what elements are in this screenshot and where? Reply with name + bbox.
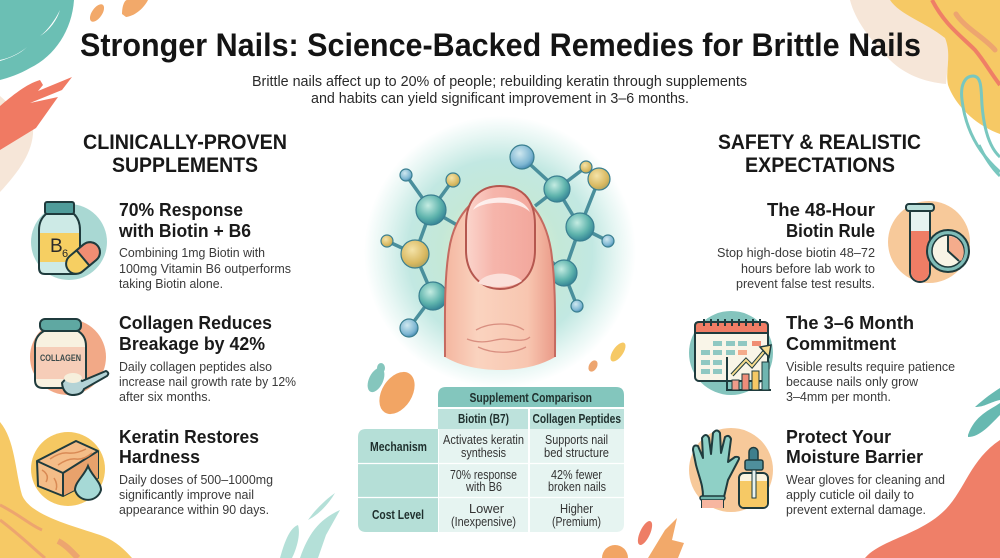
text: 3-6 month commitment: 3–4mm per month.	[786, 389, 891, 404]
text: protect your moisture barrier: apply cuticle oil daily to	[786, 487, 914, 502]
text: protect your moisture barrier	[786, 427, 945, 517]
text: collagen reduces breakage: increase nail growth rate by 12%	[119, 374, 296, 389]
text: 70% response: taking Biotin alone.	[119, 276, 223, 291]
table: supplement comparison: 70% response	[450, 468, 517, 482]
text: collagen reduces breakage	[119, 313, 296, 404]
subtitle: and habits can yield significant improvement in 3–6 months.	[311, 91, 689, 107]
icon: test tube and clock	[888, 201, 970, 283]
finger	[445, 205, 555, 370]
decoration: bottom right coral blob and teal brush	[865, 388, 1000, 558]
icon: keratin block and droplet	[31, 432, 105, 506]
decoration: top left teal and red brush strokes	[0, 0, 148, 192]
text: 48-hour biotin rule: prevent false test results.	[736, 276, 875, 291]
heading: safety and realistic expectations: SAFETY & REALISTIC	[718, 131, 921, 154]
nail	[466, 186, 535, 289]
text: protect your moisture barrier: Protect Your	[786, 427, 891, 447]
text: 70% response: 70% Response	[119, 200, 243, 220]
table: supplement comparison: broken nails	[548, 480, 606, 494]
title: Stronger Nails: Science-Backed Remedies for Brittle Nails	[80, 27, 921, 63]
text: protect your moisture barrier: Moisture Barrier	[786, 447, 923, 467]
text: 70% response: with Biotin + B6	[118, 221, 251, 241]
text: 48-hour biotin rule: Stop high-dose biotin 48–72	[717, 245, 875, 260]
text: 48-hour biotin rule: hours before lab work to	[741, 261, 875, 276]
heading: clinically-proven supplements	[83, 131, 287, 177]
table: supplement comparison	[358, 387, 624, 532]
text: collagen reduces breakage: Daily collagen peptides also	[119, 359, 272, 374]
table: supplement comparison: Supplement Comparison	[470, 391, 592, 405]
table: supplement comparison: bed structure	[544, 446, 609, 460]
text: 48-hour biotin rule: Biotin Rule	[786, 221, 875, 241]
icon: B6 bottle and capsule: 6	[62, 248, 68, 260]
table: supplement comparison: Cost Level	[372, 508, 424, 522]
table: supplement comparison: 42% fewer	[551, 468, 602, 482]
heading: safety and realistic expectations: EXPECTATIONS	[745, 154, 895, 177]
heading: safety and realistic expectations	[718, 131, 921, 177]
text: 48-hour biotin rule	[717, 200, 875, 291]
text: 48-hour biotin rule: The 48-Hour	[767, 200, 875, 220]
text: keratin restores hardness: significantly improve nail	[119, 487, 254, 502]
text: 70% response	[118, 200, 291, 291]
decoration: bottom centre brush marks	[280, 340, 684, 558]
icon: glove and cuticle oil dropper	[689, 428, 773, 512]
text: collagen reduces breakage: after six months.	[119, 389, 211, 404]
text: collagen reduces breakage: Breakage by 42%	[119, 334, 265, 354]
table: supplement comparison: synthesis	[461, 446, 506, 460]
text: 3-6 month commitment: Commitment	[786, 334, 896, 354]
heading: clinically-proven supplements: SUPPLEMENTS	[112, 154, 258, 177]
illustration: fingernail with molecules	[364, 116, 636, 388]
table: supplement comparison: Biotin (B7)	[458, 412, 509, 426]
text: 3-6 month commitment: Visible results require patience	[786, 359, 955, 374]
subtitle	[252, 74, 747, 107]
decoration: bottom left yellow blob	[0, 422, 132, 558]
text: keratin restores hardness	[119, 427, 273, 517]
text: 3-6 month commitment	[786, 313, 955, 404]
text: protect your moisture barrier: Wear gloves for cleaning and	[786, 472, 945, 487]
molecule atoms	[381, 145, 614, 337]
icon: collagen jar and scoop: COLLAGEN	[40, 353, 81, 363]
table: supplement comparison: (Premium)	[552, 515, 601, 529]
table: supplement comparison: Lower	[469, 502, 504, 516]
table: supplement comparison: Activates keratin	[443, 433, 524, 447]
subtitle: Brittle nails affect up to 20% of people; rebuilding keratin through supplements	[252, 74, 747, 90]
table: supplement comparison: Mechanism	[370, 440, 427, 454]
table: supplement comparison: with B6	[465, 480, 502, 494]
text: 70% response: 100mg Vitamin B6 outperforms	[119, 261, 291, 276]
heading: clinically-proven supplements: CLINICALLY-PROVEN	[83, 131, 287, 154]
table: supplement comparison: Collagen Peptides	[532, 412, 621, 426]
icon: collagen jar and scoop	[30, 319, 108, 395]
icon: B6 bottle and capsule	[31, 202, 107, 280]
icon: B6 bottle and capsule: B	[50, 236, 63, 257]
text: collagen reduces breakage: Collagen Reduces	[119, 313, 272, 333]
decoration: top right yellow blob with strokes	[850, 0, 1000, 176]
table: supplement comparison: Supports nail	[545, 433, 608, 447]
text: 70% response: Combining 1mg Biotin with	[119, 245, 265, 260]
molecule links	[387, 157, 608, 328]
text: protect your moisture barrier: prevent external damage.	[786, 502, 926, 517]
text: keratin restores hardness: Hardness	[119, 447, 200, 467]
knuckle wrinkles	[467, 324, 530, 352]
table: supplement comparison: Higher	[560, 502, 593, 516]
text: keratin restores hardness: Daily doses of 500–1000mg	[119, 472, 273, 487]
glow behind finger	[364, 116, 636, 388]
table: supplement comparison: (Inexpensive)	[451, 515, 516, 529]
text: keratin restores hardness: appearance within 90 days.	[119, 502, 269, 517]
text: 3-6 month commitment: because nails only grow	[786, 374, 919, 389]
text: 3-6 month commitment: The 3–6 Month	[786, 313, 914, 333]
icon: calendar with growth chart	[689, 311, 773, 395]
text: keratin restores hardness: Keratin Restores	[119, 427, 259, 447]
